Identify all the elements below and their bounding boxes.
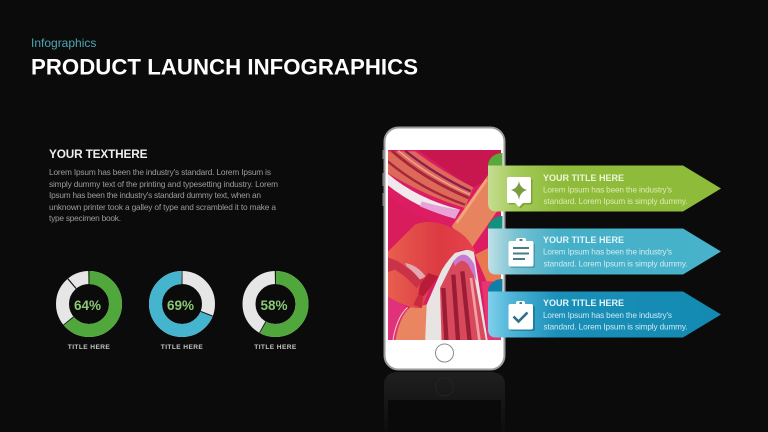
text block body: Lorem Ipsum has been the industry's standard. Lorem Ipsum is <box>49 167 271 177</box>
ribbon text: standard. Lorem Ipsum is simply dummy. <box>544 260 688 268</box>
text block body: unknown printer took a galley of type and scrambled it to make a <box>49 202 276 212</box>
eyebrow label: Infographics <box>31 36 96 50</box>
donut chart: 64% <box>62 271 116 351</box>
donut chart: 69% <box>156 271 213 351</box>
text block body: Ipsum has been the industry's standard dummy text, when an <box>49 190 261 200</box>
donut chart: 64%: TITLE HERE <box>68 344 110 351</box>
ribbon text: Lorem Ipsum has been the industry's <box>543 248 672 256</box>
ribbon 2: teal <box>488 216 721 274</box>
ribbon curl <box>488 216 502 229</box>
ribbon text <box>543 235 688 268</box>
icon: sparkle badge <box>507 177 532 208</box>
phone reflection <box>384 372 505 432</box>
ribbon text: YOUR TITLE HERE <box>543 173 624 183</box>
donut chart: 69%: 69% <box>167 298 194 313</box>
ribbon text: standard. Lorem Ipsum is simply dummy. <box>544 322 688 332</box>
phone <box>383 128 505 370</box>
home button <box>436 344 454 362</box>
donut chart: 58%: 58% <box>260 298 288 313</box>
ribbon text: Lorem Ipsum has been the industry's <box>543 186 672 194</box>
phone screen image <box>385 148 505 345</box>
ribbon text: YOUR TITLE HERE <box>543 298 624 308</box>
text block: your text here <box>49 147 278 223</box>
ribbon text: YOUR TITLE HERE <box>543 235 624 245</box>
phone body <box>384 128 504 370</box>
ribbon text: standard. Lorem Ipsum is simply dummy. <box>544 197 688 206</box>
icon: check clipboard <box>508 301 535 331</box>
ribbon curl <box>488 279 502 292</box>
donut chart: 58%: TITLE HERE <box>254 344 297 351</box>
icon: document clipboard <box>508 238 535 268</box>
text block body <box>49 167 278 223</box>
ribbon 1: green <box>488 153 721 212</box>
ribbon shape <box>488 166 721 212</box>
text block heading: YOUR TEXTHERE <box>49 147 148 161</box>
ribbon 3: blue <box>488 279 721 338</box>
ribbon text <box>543 298 688 332</box>
text block body: simply dummy text of the printing and typesetting industry. Lorem <box>49 179 278 189</box>
text block body: type specimen book. <box>49 213 121 223</box>
donut chart: 58% <box>249 271 302 351</box>
donut chart: 64%: 64% <box>74 298 101 313</box>
ribbon text: Lorem Ipsum has been the industry's <box>543 311 672 320</box>
ribbon curl <box>488 153 502 166</box>
donut chart: 69%: TITLE HERE <box>161 344 203 351</box>
ribbon shape <box>488 292 721 338</box>
phone side buttons <box>382 150 384 206</box>
title: PRODUCT LAUNCH INFOGRAPHICS <box>31 54 418 80</box>
ribbon text <box>543 173 688 206</box>
ribbon shape <box>488 228 721 274</box>
